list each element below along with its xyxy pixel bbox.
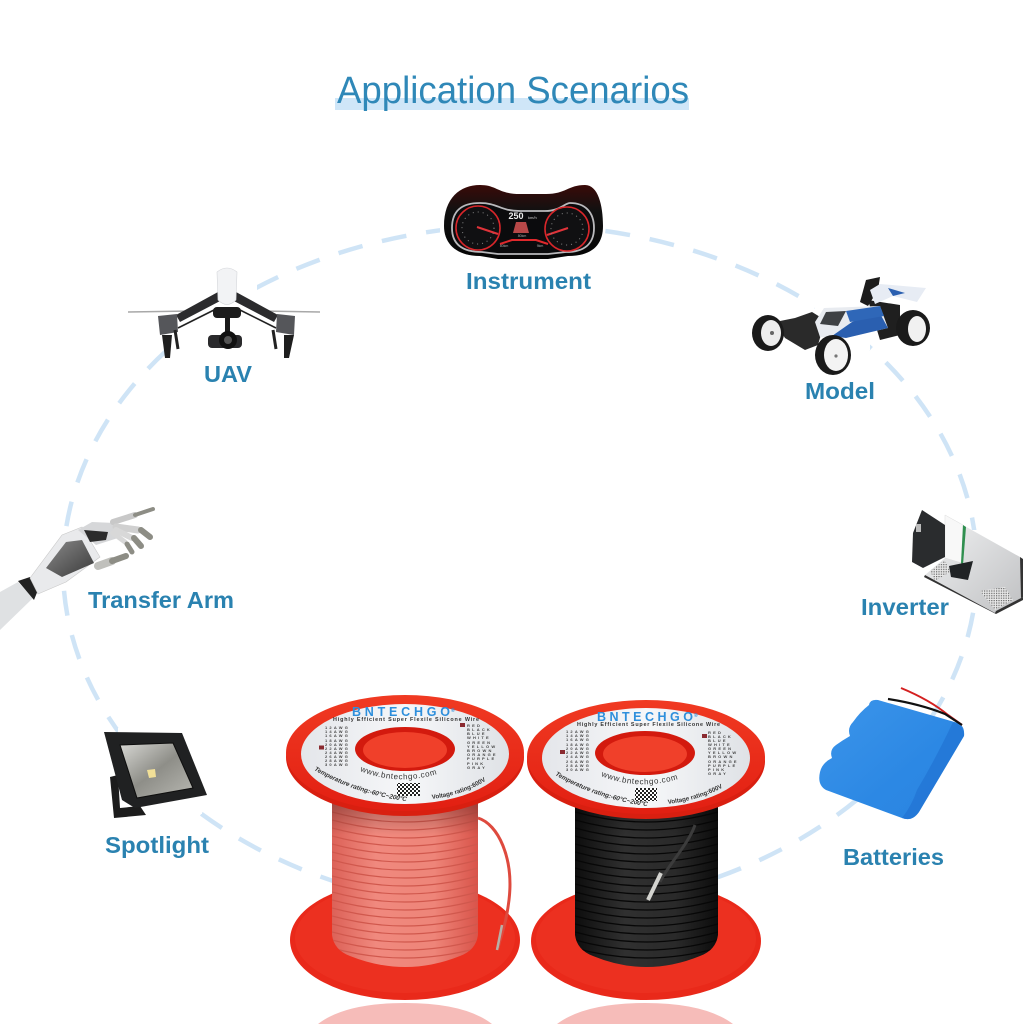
AWG size list, black spool: 16AWG [566,737,591,742]
AWG size list: 30AWG [325,762,350,767]
AWG size list, black spool: 30AWG [566,767,591,772]
colour list, black spool [702,730,739,776]
colour list: BROWN [467,748,494,753]
colour list, black spool: WHITE [708,742,732,747]
dashed application ring [55,175,990,920]
AWG size list: 26AWG [325,754,350,759]
label: Batteries: Batteries [843,844,944,870]
icon: battery pack [819,688,964,819]
colour list: GRAY [467,765,487,770]
red wire spool: Temperature rating:-60°C~200°C [315,766,407,801]
reflection of spools [318,1003,733,1024]
icon: instrument cluster: 9km [537,244,543,248]
colour list, black spool: PURPLE [708,763,737,768]
AWG size list: 24AWG [325,750,350,755]
black wire spool: Voltage rating:600V [668,784,722,804]
colour list, black spool: GREEN [708,746,733,751]
red wire spool: BNTECHGO [352,705,450,719]
icon: instrument cluster: 80km [518,234,526,238]
AWG size list: 22AWG [325,746,350,751]
title: Application Scenarios [337,70,689,112]
AWG size list: 20AWG [325,742,350,747]
AWG size list, black spool: 14AWG [566,733,591,738]
icon: instrument cluster: 60km [500,244,508,248]
colour list [460,723,498,770]
icon: instrument cluster [444,185,603,259]
AWG size list, black spool: 24AWG [566,754,591,759]
AWG size list: 28AWG [325,758,350,763]
colour list: BLACK [467,727,492,732]
label: Model: Model [805,378,875,404]
colour list, black spool: BLUE [708,738,728,743]
icon: inverter [912,510,1023,614]
red wire spool: Highly Efficient Super Flexile Silicone Wire [333,717,479,723]
icon: instrument cluster: 250 [508,211,524,221]
AWG size list, black spool: 12AWG [566,729,591,734]
AWG size list: 12AWG [325,725,350,730]
AWG size list, black spool: 22AWG [566,750,591,755]
black wire spool: BNTECHGO [597,710,693,724]
AWG size list: 14AWG [325,729,350,734]
label: Transfer Arm: Transfer Arm [88,587,234,613]
AWG size list: 16AWG [325,733,350,738]
red wire spool: www.bntechgo.com [361,767,436,781]
icon: robotic transfer arm [0,509,153,630]
icon: instrument cluster: km/h [528,215,537,220]
label: Inverter: Inverter [861,594,949,620]
colour list: BLUE [467,731,487,736]
AWG size list, black spool [560,729,591,772]
colour list: RED [467,723,482,728]
AWG size list, black spool: 20AWG [566,746,591,751]
red wire spool [286,695,524,1000]
AWG size list, black spool: 18AWG [566,742,591,747]
colour list, black spool: PINK [708,767,726,772]
colour list, black spool: GRAY [708,771,728,776]
black wire spool: Highly Efficient Super Flexile Silicone Wire [577,722,720,728]
colour list, black spool: YELLOW [708,750,738,755]
icon: UAV drone [128,268,320,358]
colour list, black spool: BLACK [708,734,733,739]
colour list: WHITE [467,735,491,740]
icon: LED spotlight [104,732,207,818]
black wire spool: Temperature rating:-60°C~200°C [556,772,648,806]
label: Spotlight: Spotlight [105,832,209,858]
colour list: ORANGE [467,752,498,757]
colour list, black spool: ORANGE [708,759,739,764]
colour list: YELLOW [467,744,497,749]
red wire spool: Voltage rating:600V [432,777,484,799]
colour list: PURPLE [467,756,496,761]
AWG size list [319,725,350,767]
icon: RC model car [752,277,930,375]
colour list, black spool: RED [708,730,723,735]
colour list: GREEN [467,740,492,745]
red wire spool: ® [451,707,455,714]
colour list, black spool: BROWN [708,754,735,759]
colour list: PINK [467,761,485,766]
black wire spool: www.bntechgo.com [602,772,678,786]
black wire spool [527,700,765,1000]
label: UAV: UAV [204,361,253,387]
AWG size list, black spool: 28AWG [566,763,591,768]
black wire spool: ® [694,712,698,719]
label: Instrument: Instrument [466,268,591,294]
AWG size list: 18AWG [325,738,350,743]
AWG size list, black spool: 26AWG [566,759,591,764]
